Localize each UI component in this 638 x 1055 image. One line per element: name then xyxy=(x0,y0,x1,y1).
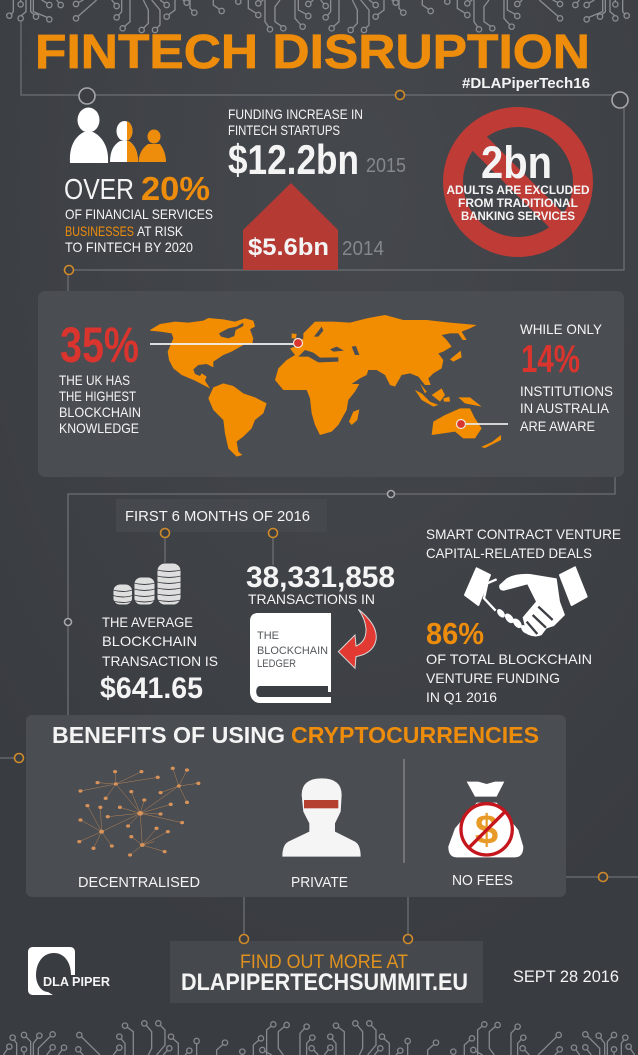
top circuit pattern xyxy=(7,0,629,33)
benefits heading: CRYPTOCURRENCIES xyxy=(291,722,539,748)
stat: transactions count: 38,331,858 xyxy=(246,561,395,594)
no-sign: 2bn adults excluded: ADULTS ARE EXCLUDED xyxy=(446,185,590,197)
icon: network xyxy=(77,767,200,857)
stat: over 20%: TO FINTECH BY 2020 xyxy=(65,239,193,255)
no-sign: 2bn adults excluded: BANKING SERVICES xyxy=(461,211,575,223)
stat: Australia 14%: INSTITUTIONS xyxy=(520,383,613,399)
panel: world map xyxy=(38,291,624,477)
stat: UK 35%: BLOCKCHAIN xyxy=(59,404,141,420)
panel: benefits xyxy=(26,715,566,897)
icon: blockchain ledger book xyxy=(250,613,331,703)
stat: over 20%: OF FINANCIAL SERVICES xyxy=(65,206,213,222)
Australia pointer xyxy=(456,420,508,428)
funding heading: FINTECH STARTUPS xyxy=(228,122,340,138)
benefits heading: BENEFITS OF USING xyxy=(52,722,285,748)
stat: UK 35%: 35% xyxy=(60,317,139,373)
stat: transactions count: TRANSACTIONS IN xyxy=(248,591,375,607)
icon: money bag no fees xyxy=(448,782,523,857)
stat: average transaction: THE AVERAGE xyxy=(102,614,193,630)
world map xyxy=(150,315,501,457)
no-sign: 2bn adults excluded xyxy=(446,117,590,247)
stat: over 20% xyxy=(64,170,213,255)
call to action box: FIND OUT MORE AT xyxy=(240,952,408,973)
stat: over 20%: BUSINESSES xyxy=(65,223,134,239)
logo: DLA Piper: DLA PIPER xyxy=(43,975,110,989)
no-sign: 2bn adults excluded: FROM TRADITIONAL xyxy=(458,198,578,210)
stat: Australia 14%: ARE AWARE xyxy=(520,418,595,434)
stat: 86% xyxy=(426,616,592,705)
date: SEPT 28 2016 xyxy=(513,967,619,986)
stat: average transaction xyxy=(100,614,218,705)
bottom circuit pattern xyxy=(3,1021,635,1055)
stat: UK 35%: THE HIGHEST xyxy=(59,388,136,404)
funding heading xyxy=(228,106,363,138)
benefit labels: NO FEES xyxy=(452,872,513,889)
benefit labels xyxy=(78,872,513,891)
hashtag: #DLAPiperTech16 xyxy=(462,75,590,92)
house-shaped bar: 5.6bn 2014: 2014 xyxy=(342,238,384,260)
icon: people xyxy=(70,108,166,163)
smart contract heading xyxy=(426,526,621,561)
smart contract heading: SMART CONTRACT VENTURE xyxy=(426,526,621,542)
call to action box: DLAPIPERTECHSUMMIT.EU xyxy=(181,969,468,996)
house-shaped bar: 5.6bn 2014: $5.6bn xyxy=(248,234,329,261)
icon: coins xyxy=(113,563,181,605)
stat: Australia 14%: WHILE ONLY xyxy=(520,321,603,337)
logo: DLA Piper xyxy=(28,947,110,995)
stat: Australia 14%: 14% xyxy=(521,338,580,381)
benefit labels: PRIVATE xyxy=(291,874,348,891)
stat: average transaction: $641.65 xyxy=(100,672,203,705)
icon: money bag no fees: $ xyxy=(475,806,498,853)
funding heading: FUNDING INCREASE IN xyxy=(228,106,363,122)
smart contract heading: CAPITAL-RELATED DEALS xyxy=(426,545,592,561)
stat: over 20%: OVER xyxy=(64,174,134,206)
stat: 86%: IN Q1 2016 xyxy=(426,689,497,705)
stat: 12.2bn 2015: $12.2bn xyxy=(228,136,359,183)
stat: UK 35% xyxy=(59,317,141,436)
stat: over 20%: 20% xyxy=(141,170,210,207)
stat: Australia 14%: IN AUSTRALIA xyxy=(520,400,610,416)
first 6 months label xyxy=(116,499,327,538)
icon: private person xyxy=(282,778,361,857)
first 6 months label: FIRST 6 MONTHS OF 2016 xyxy=(125,508,310,525)
stat: 86%: 86% xyxy=(426,616,484,651)
icon: blockchain ledger book: BLOCKCHAIN xyxy=(257,645,328,657)
title: FINTECH DISRUPTION xyxy=(35,26,590,79)
stat: over 20%: AT RISK xyxy=(137,223,184,239)
benefits heading xyxy=(52,722,539,748)
no-sign: 2bn adults excluded: 2bn xyxy=(481,137,552,188)
icon: handshake xyxy=(465,567,587,636)
stat: 86%: OF TOTAL BLOCKCHAIN xyxy=(426,651,592,667)
call to action box xyxy=(170,934,483,1003)
stat: average transaction: TRANSACTION IS xyxy=(102,653,218,669)
stat: 86%: VENTURE FUNDING xyxy=(426,670,560,686)
icon: blockchain ledger book: LEDGER xyxy=(257,658,296,670)
stat: 12.2bn 2015: 2015 xyxy=(366,155,406,177)
UK pointer xyxy=(150,338,302,348)
house-shaped bar: 5.6bn 2014 xyxy=(243,183,384,270)
icon: blockchain ledger book: THE xyxy=(257,630,279,642)
stat: Australia 14% xyxy=(520,321,613,434)
stat: UK 35%: KNOWLEDGE xyxy=(59,420,139,436)
stat: average transaction: BLOCKCHAIN xyxy=(102,633,197,649)
benefit labels: DECENTRALISED xyxy=(78,874,200,891)
stat: UK 35%: THE UK HAS xyxy=(59,372,130,388)
arrow: red curved xyxy=(338,609,376,668)
